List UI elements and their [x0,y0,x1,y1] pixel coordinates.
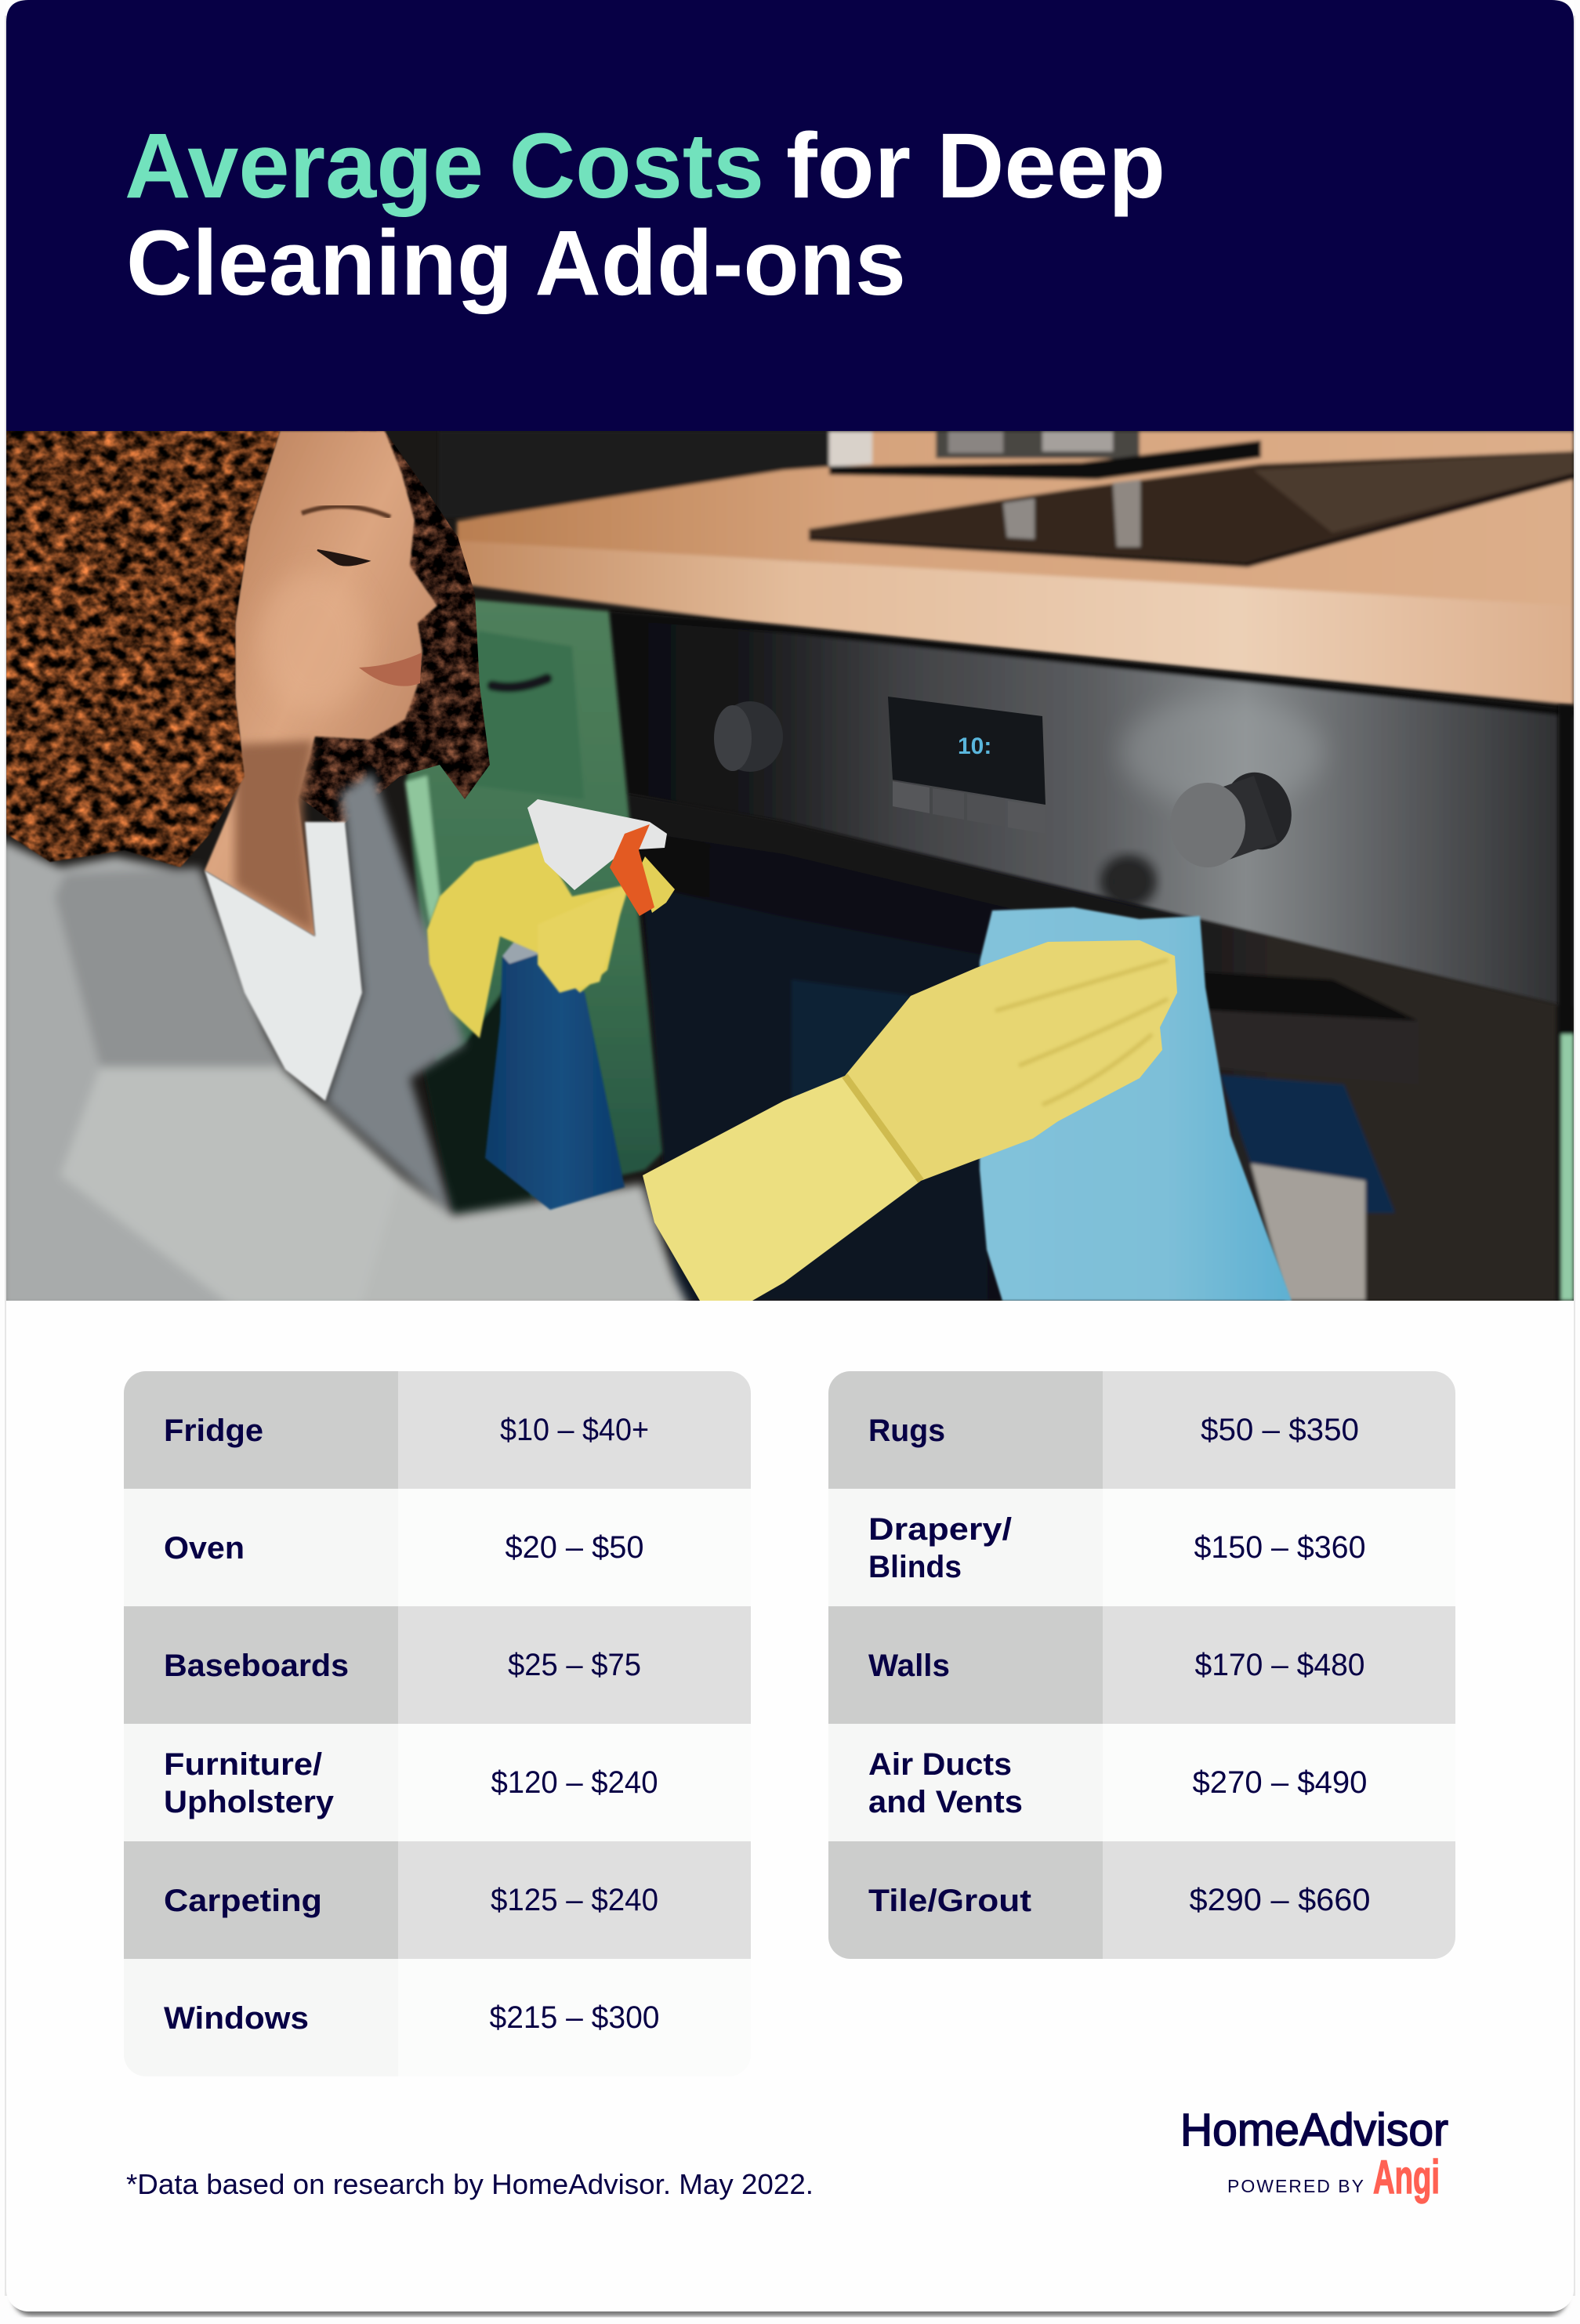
logo: HomeAdvisor powered by Angi [1180,2105,1448,2203]
table: right cost table [828,1371,1455,1959]
row: Fridge: Fridge [164,1414,263,1448]
row: Walls [828,1606,1455,1724]
oven knobs [714,701,1301,867]
left glove [427,842,629,1038]
row: Walls: $170 – $480 [1194,1648,1365,1682]
blue cleaning cloth [980,907,1292,1301]
white shirt [205,822,362,1101]
row: Tile/Grout [828,1841,1455,1959]
title: Average Costs [125,114,764,218]
green cabinet [405,599,662,1215]
table: left cost table [124,1371,751,2076]
row: Drapery/Blinds: Drapery/ [868,1512,1012,1547]
row: Windows [124,1959,751,2076]
row: Tile/Grout: $290 – $660 [1190,1883,1370,1917]
main hair mass [6,431,280,867]
logo: HomeAdvisor powered by Angi: Angi [1373,2151,1440,2203]
row: Air Ducts and Vents: Air Ducts [868,1747,1012,1782]
row: Windows: $215 – $300 [489,2000,660,2035]
row: Tile/Grout: Tile/Grout [868,1884,1031,1918]
row: Drapery/Blinds [828,1489,1455,1606]
right hair behind face [295,431,490,827]
footnote: *Data based on research by HomeAdvisor. May 2022. [126,2168,814,2200]
oven control panel [609,611,1574,1007]
row: Drapery/Blinds: Blinds [868,1550,962,1584]
row: Baseboards: Baseboards [164,1649,349,1683]
logo: HomeAdvisor powered by Angi: POWERED BY [1227,2176,1364,2196]
row: Rugs: $50 – $350 [1201,1413,1359,1447]
row: Fridge: $10 – $40+ [500,1413,649,1447]
title: for Deep [786,114,1165,218]
row: Baseboards [124,1606,751,1724]
row: Furniture/Upholstery: Furniture/ [164,1747,322,1782]
row: Drapery/Blinds: $150 – $360 [1194,1530,1365,1565]
row: Carpeting: $125 – $240 [491,1883,658,1917]
title [125,114,1165,315]
row: Furniture/Upholstery [124,1724,751,1841]
panel: navy header [6,0,1574,431]
row: Rugs: Rugs [868,1414,945,1448]
row: Rugs [828,1371,1455,1489]
cardigan [0,772,690,1309]
oven display and buttons [888,697,1045,816]
row: Walls: Walls [868,1649,950,1683]
row: Air Ducts and Vents: and Vents [868,1785,1023,1819]
face and neck [205,431,437,936]
row: Carpeting: Carpeting [164,1884,322,1918]
spray head and trigger [527,799,675,916]
kitchen countertop and cooktop [439,431,1574,705]
row: Oven [124,1489,751,1606]
logo: HomeAdvisor powered by Angi: HomeAdvisor [1180,2105,1448,2156]
facial features [302,506,422,686]
row: Baseboards: $25 – $75 [508,1648,641,1682]
row: Air Ducts and Vents [828,1724,1455,1841]
spray bottle [484,942,625,1211]
row: Windows: Windows [164,2001,309,2036]
row: Air Ducts and Vents: $270 – $490 [1193,1765,1367,1800]
oven door [627,705,1574,1301]
row: Fridge [124,1371,751,1489]
row: Furniture/Upholstery: Upholstery [164,1785,335,1819]
title: Cleaning Add-ons [126,212,906,315]
right glove [643,940,1177,1301]
oven display and buttons: 10: [958,733,991,759]
row: Furniture/Upholstery: $120 – $240 [491,1765,658,1800]
row: Oven: $20 – $50 [505,1530,644,1565]
row: Carpeting [124,1841,751,1959]
photo: woman cleaning an oven [0,431,1574,1309]
row: Oven: Oven [164,1531,245,1566]
